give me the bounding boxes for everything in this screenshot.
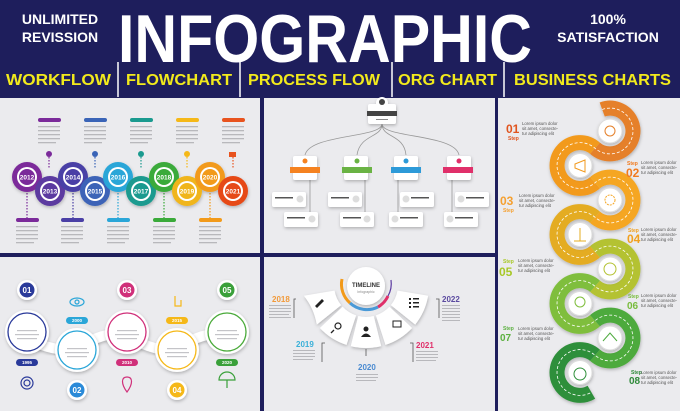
number badges: 01 — [23, 286, 32, 295]
connectors — [305, 124, 459, 220]
step labels: Step — [503, 259, 514, 265]
top labels — [38, 118, 245, 143]
step labels: Step — [627, 161, 638, 167]
step texts: Lorem ipsum dolor — [518, 326, 554, 331]
step texts: tur adipiscing elit — [518, 268, 551, 273]
big circles — [5, 280, 249, 400]
step labels: 08 — [629, 376, 641, 387]
year pills: 2000 — [72, 318, 83, 323]
step icons — [568, 119, 622, 384]
year pills: 1995 — [22, 360, 33, 365]
number badges: 04 — [173, 386, 182, 395]
step texts: sit amet, consecte- — [522, 126, 559, 131]
step texts: tur adipiscing elit — [518, 336, 551, 341]
year circles: 2021 — [226, 188, 241, 196]
year pills: 2010 — [122, 360, 133, 365]
step texts: sit amet, consecte- — [641, 375, 678, 380]
step labels: Step — [628, 294, 639, 300]
year circles: 2012 — [20, 174, 35, 182]
step labels: Step — [631, 370, 642, 376]
step labels: Step — [508, 136, 519, 142]
top box — [368, 97, 396, 124]
small icons + connectors — [27, 157, 233, 218]
year labels — [272, 295, 460, 372]
year circles: 2013 — [43, 188, 58, 196]
year pills — [16, 317, 238, 366]
category labels: BUSINESS CHARTS — [514, 72, 671, 89]
step labels: Step — [503, 208, 514, 214]
step labels: 06 — [627, 301, 639, 312]
year circles: 2019 — [180, 188, 195, 196]
step texts: sit amet, consecte- — [518, 263, 555, 268]
year circles: 2016 — [111, 174, 126, 182]
text: satisfaction: 100% — [590, 11, 626, 27]
category labels: WORKFLOW — [6, 72, 112, 89]
panel: flowchart circles — [0, 257, 260, 411]
step texts: tur adipiscing elit — [641, 380, 674, 385]
step texts: sit amet, consecte- — [518, 331, 555, 336]
step texts: Lorem ipsum dolor — [641, 370, 677, 375]
child boxes — [290, 156, 473, 180]
timeline circle: Infographic — [357, 290, 375, 294]
small icons — [21, 296, 235, 392]
step texts: tur adipiscing elit — [519, 203, 552, 208]
step texts: Lorem ipsum dolor — [522, 121, 558, 126]
text: satisfaction — [557, 11, 659, 45]
year pills: 2020 — [222, 360, 233, 365]
step texts: Lorem ipsum dolor — [641, 293, 677, 298]
year labels: 2018 — [272, 295, 290, 304]
step labels: 01 — [506, 122, 520, 136]
number badges: 03 — [123, 286, 132, 295]
text: unlimited revision: REVISSION — [22, 29, 98, 45]
timeline circle: TIMELINE — [352, 283, 380, 289]
sub boxes — [272, 192, 489, 227]
step labels — [499, 122, 642, 387]
segment icons — [315, 298, 419, 337]
timeline circle — [347, 267, 385, 305]
step texts: tur adipiscing elit — [641, 170, 674, 175]
year circles: 2020 — [203, 174, 218, 182]
step labels: Step — [503, 326, 514, 332]
year circles — [12, 162, 248, 206]
step labels: 02 — [626, 166, 640, 180]
step labels: 04 — [627, 232, 641, 246]
step texts: Lorem ipsum dolor — [641, 160, 677, 165]
number badges: 02 — [73, 386, 82, 395]
colored arc — [341, 279, 391, 310]
year circles: 2017 — [134, 188, 149, 196]
step texts: sit amet, consecte- — [641, 232, 678, 237]
year labels: 2019 — [296, 340, 314, 349]
category labels: ORG CHART — [398, 72, 497, 89]
year circles: 2015 — [88, 188, 103, 196]
panel: org chart — [264, 97, 495, 253]
text: unlimited revision — [22, 11, 98, 45]
year circles: 2018 — [157, 174, 172, 182]
step texts: Lorem ipsum dolor — [518, 258, 554, 263]
step texts: tur adipiscing elit — [641, 237, 674, 242]
category labels: FLOWCHART — [126, 72, 232, 89]
step labels: 03 — [500, 194, 514, 208]
year labels: 2020 — [358, 363, 376, 372]
connector band — [20, 334, 227, 350]
year pills: 2015 — [172, 318, 183, 323]
year labels: 2021 — [416, 341, 434, 350]
title: INFOGRAPHIC — [118, 1, 532, 77]
step texts: sit amet, consecte- — [641, 165, 678, 170]
panel: business road chart — [498, 98, 680, 411]
fan segments — [304, 291, 428, 348]
category labels: PROCESS FLOW — [248, 72, 381, 89]
year labels: 2022 — [442, 295, 460, 304]
year circles: 2014 — [66, 174, 81, 182]
circle text — [15, 330, 239, 357]
road — [557, 108, 633, 395]
step labels: Step — [628, 228, 639, 234]
step texts: Lorem ipsum dolor — [641, 227, 677, 232]
panel: timeline fan — [264, 257, 495, 411]
text: unlimited revision: UNLIMITED — [22, 11, 98, 27]
category labels — [6, 72, 671, 89]
step texts: sit amet, consecte- — [641, 298, 678, 303]
step texts: tur adipiscing elit — [522, 131, 555, 136]
bottom labels — [16, 218, 222, 243]
number badges: 05 — [223, 286, 232, 295]
step texts: Lorem ipsum dolor — [519, 193, 555, 198]
step labels: 05 — [499, 265, 513, 279]
step labels: 07 — [500, 333, 512, 344]
number badges — [20, 282, 234, 398]
step texts: sit amet, consecte- — [519, 198, 556, 203]
step texts: tur adipiscing elit — [641, 303, 674, 308]
panel: workflow timeline — [0, 98, 260, 253]
text: satisfaction: SATISFACTION — [557, 29, 659, 45]
header — [6, 1, 671, 97]
step texts — [518, 121, 678, 385]
